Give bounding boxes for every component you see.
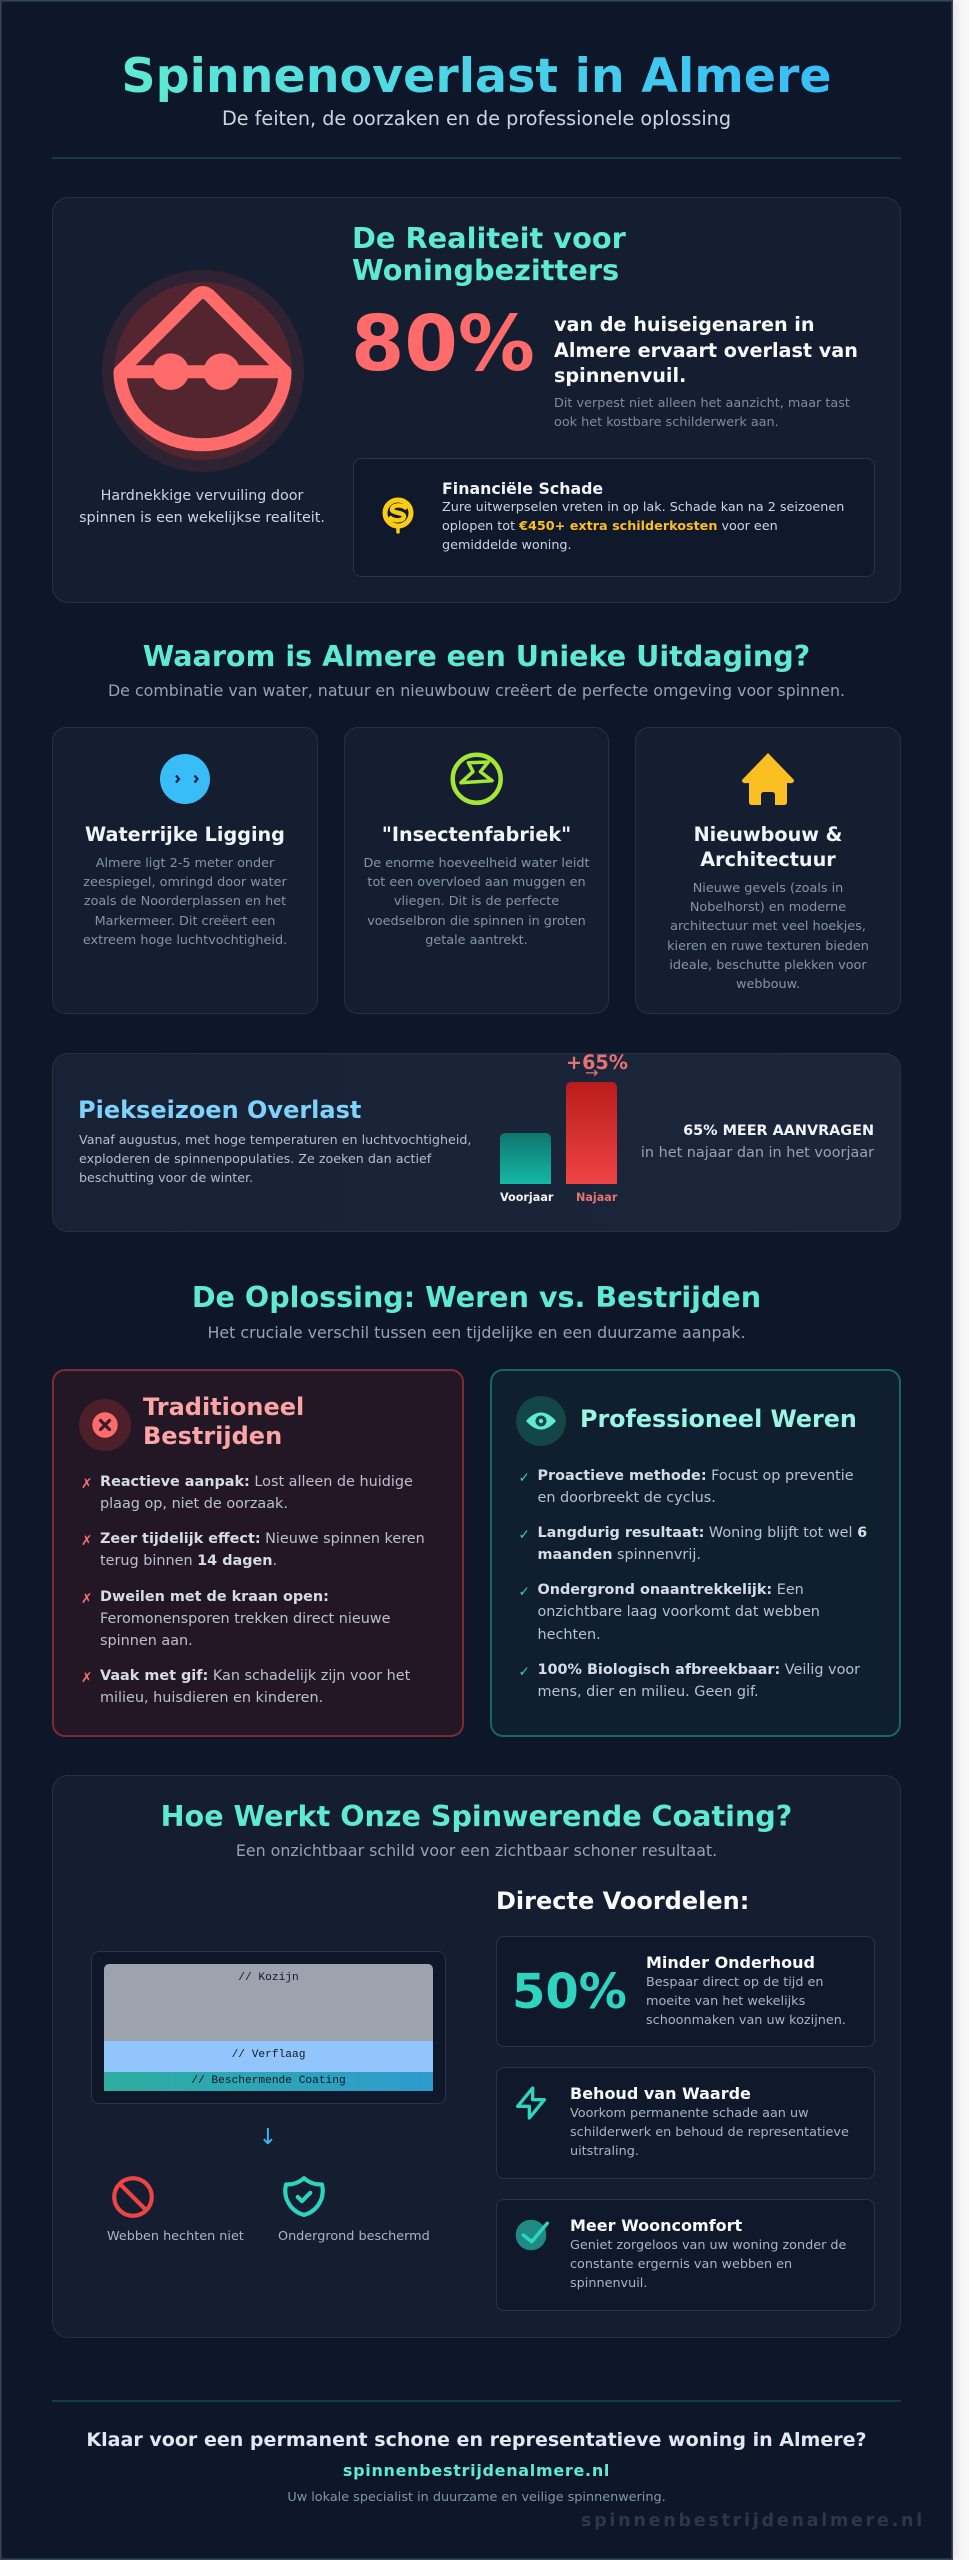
card text: getale aantrekt. <box>425 933 528 948</box>
card title: "Insectenfabriek" <box>382 823 571 846</box>
callout text: Zure uitwerpselen vreten in op lak. Schade kan na 2 seizoenen <box>442 500 844 515</box>
card text <box>83 856 287 948</box>
heading: peak season: Piekseizoen Overlast <box>78 1096 361 1124</box>
diagram: coating layers <box>91 1951 446 2104</box>
list item: 100% Biologisch afbreekbaar: Veilig voor <box>538 1662 860 1678</box>
peak season text: exploderen de spinnenpopulaties. Ze zoeken dan actief <box>79 1151 431 1166</box>
panel: traditional control: ✗ <box>81 1533 92 1549</box>
callout text: oplopen tot €450+ extra schilderkosten voor een <box>442 519 778 534</box>
panel: new construction <box>635 727 901 1014</box>
panel: insect factory <box>344 727 609 1014</box>
label: paint: // Verflaag <box>232 2049 305 2061</box>
peak season statistic: in het najaar dan in het voorjaar <box>641 1145 874 1161</box>
card text: ideale, beschutte plekken voor <box>669 958 867 973</box>
icon caption <box>79 488 325 526</box>
statistic: 50 percent: 50% <box>512 1964 627 2020</box>
card text: Almere ligt 2-5 meter onder <box>96 856 274 871</box>
list item: Dweilen met de kraan open: <box>100 1588 329 1604</box>
layer: protective coating <box>104 2072 433 2091</box>
benefit: more comfort <box>496 2199 875 2311</box>
card title: Nieuwbouw & <box>694 823 842 846</box>
peak season text: beschutting voor de winter. <box>79 1170 253 1185</box>
benefit text: spinnenvuil. <box>570 2276 647 2291</box>
panel: traditional control: ✗ <box>81 1590 92 1606</box>
list item <box>81 1474 413 1512</box>
icon caption: spinnen is een wekelijkse realiteit. <box>79 510 325 526</box>
layer: window frame <box>104 1964 433 2041</box>
subheading: solution: Het cruciale verschil tussen een tijdelijke en een duurzame aanpak. <box>208 1323 745 1342</box>
footer link: spinnenbestrijdenalmere.nl <box>343 2461 610 2480</box>
benefit text: Bespaar direct op de tijd en <box>646 1974 824 1990</box>
list item: milieu, huisdieren en kinderen. <box>100 1690 323 1706</box>
card text: tot een overvloed aan muggen en <box>367 875 586 890</box>
footer call to action: Klaar voor een permanent schone en representatieve woning in Almere? <box>86 2429 867 2451</box>
statistic description: Almere ervaart overlast van <box>554 339 858 362</box>
heading: traditional <box>143 1393 304 1450</box>
heading: reality <box>352 221 626 287</box>
list item: terug binnen 14 dagen. <box>100 1553 277 1569</box>
list item: en doorbreekt de cyclus. <box>538 1490 716 1506</box>
card text: zoals de Noorderplassen en het <box>84 894 286 909</box>
card text <box>363 856 590 948</box>
icon: check <box>516 2220 550 2250</box>
title: Spinnenoverlast in Almere <box>121 49 832 104</box>
peak season text <box>79 1132 471 1185</box>
list item: mens, dier en milieu. Geen gif. <box>538 1684 759 1700</box>
card text: kieren en ruwe texturen bieden <box>667 939 869 954</box>
card text: webbouw. <box>736 977 800 992</box>
footer note: Uw lokale specialist in duurzame en veilige spinnenwering. <box>287 2490 666 2505</box>
panel: reality for homeowners <box>52 197 901 603</box>
icon caption: Hardnekkige vervuiling door <box>101 488 303 504</box>
list item <box>81 1588 390 1649</box>
subheading: why Almere: De combinatie van water, natuur en nieuwbouw creëert de perfecte omgeving voor spinnen. <box>108 681 845 700</box>
icon: water <box>160 754 210 804</box>
card title: Architectuur <box>700 848 836 871</box>
icon: eye <box>516 1396 566 1446</box>
benefit text: Geniet zorgeloos van uw woning zonder de <box>570 2238 846 2253</box>
watermark: spinnenbestrijdenalmere.nl <box>581 2511 925 2531</box>
callout: financial damage <box>353 458 875 577</box>
list item: plaag op, niet de oorzaak. <box>100 1496 288 1512</box>
icon: house <box>742 753 794 805</box>
statistic note: Dit verpest niet alleen het aanzicht, maar tast <box>554 396 850 411</box>
icon: cross <box>79 1399 131 1451</box>
panel: professional prevention: ✓ <box>518 1527 530 1543</box>
peak season text: Vanaf augustus, met hoge temperaturen en luchtvochtigheid, <box>79 1132 471 1147</box>
list item <box>518 1468 854 1506</box>
panel: water location <box>52 727 318 1014</box>
list item: Reactieve aanpak: Lost alleen de huidige <box>100 1474 413 1490</box>
panel: peak season <box>52 1053 901 1232</box>
heading: why Almere: Waarom is Almere een Unieke Uitdaging? <box>143 639 810 673</box>
statistic description: van de huiseigenaren in <box>554 313 815 336</box>
icon: money <box>382 498 414 534</box>
list item: Zeer tijdelijk effect: Nieuwe spinnen keren <box>100 1531 425 1547</box>
icon: insect <box>450 752 503 805</box>
icon: shield <box>283 2176 325 2217</box>
peak season statistic <box>641 1123 874 1161</box>
benefit: preserve value <box>496 2067 875 2179</box>
label: coating: // Beschermende Coating <box>191 2075 346 2087</box>
card title <box>694 823 842 871</box>
benefit text: schilderwerk en behoud de representatieve <box>570 2125 849 2140</box>
list item: hechten. <box>538 1627 601 1643</box>
benefit text: schoonmaken van uw kozijnen. <box>646 2013 846 2028</box>
bar chart: spring vs autumn <box>500 1051 628 1204</box>
card text: Nieuwe gevels (zoals in <box>693 881 843 896</box>
label: plus 65 percent: +65% <box>566 1051 628 1074</box>
label: webs do not stick: Webben hechten niet <box>107 2229 244 2244</box>
card text: architectuur met veel hoekjes, <box>670 919 866 934</box>
panel: traditional control <box>52 1369 464 1737</box>
list item: Proactieve methode: Focust op preventie <box>538 1468 854 1484</box>
panel: traditional control: ✗ <box>81 1670 92 1686</box>
benefit title: Minder Onderhoud <box>646 1952 815 1972</box>
benefit text <box>570 2238 846 2291</box>
label: autumn: Najaar <box>576 1191 617 1204</box>
list item: Vaak met gif: Kan schadelijk zijn voor het <box>100 1668 410 1684</box>
arrow: → <box>585 1063 598 1082</box>
panel: professional prevention: ✓ <box>518 1664 530 1680</box>
card text: voedselbron die spinnen in groten <box>367 914 586 929</box>
statistic: 80 percent: 80% <box>351 300 535 389</box>
layer: paint <box>104 2041 433 2072</box>
list item <box>518 1582 820 1643</box>
list item <box>518 1525 867 1563</box>
list item: Langdurig resultaat: Woning blijft tot wel 6 <box>538 1525 867 1541</box>
icon: spider warning <box>102 270 304 472</box>
list item: maanden spinnenvrij. <box>538 1547 701 1563</box>
benefit: less maintenance <box>496 1936 875 2047</box>
bar: spring <box>500 1133 551 1184</box>
list item: Ondergrond onaantrekkelijk: Een <box>538 1582 804 1598</box>
list item <box>518 1662 860 1700</box>
panel: professional prevention <box>490 1369 901 1737</box>
card text <box>667 881 869 992</box>
statistic description: spinnenvuil. <box>554 364 686 387</box>
list item <box>81 1668 410 1706</box>
card text: extreem hoge luchtvochtigheid. <box>83 933 287 948</box>
heading: traditional: Traditioneel <box>143 1393 304 1421</box>
label: spring: Voorjaar <box>500 1191 553 1204</box>
heading: direct benefits: Directe Voordelen: <box>496 1887 749 1915</box>
card text: Markermeer. Dit creëert een <box>95 914 275 929</box>
heading: professional: Professioneel Weren <box>580 1405 857 1433</box>
card text: zeespiegel, omringd door water <box>83 875 287 890</box>
bar: autumn <box>566 1082 617 1184</box>
icon: lightning <box>516 2086 546 2120</box>
panel: coating explanation <box>52 1775 901 2338</box>
benefit text: uitstraling. <box>570 2144 639 2159</box>
callout text: gemiddelde woning. <box>442 538 572 553</box>
callout title: Financiële Schade <box>442 479 603 498</box>
icon: webs do not stick <box>112 2176 154 2218</box>
panel: traditional control: ✗ <box>81 1476 92 1492</box>
panel: professional prevention: ✓ <box>518 1470 530 1486</box>
label: surface protected: Ondergrond beschermd <box>278 2229 430 2244</box>
heading: reality: De Realiteit voor <box>352 221 626 255</box>
callout text <box>442 500 844 553</box>
list item <box>81 1531 425 1569</box>
list item: spinnen aan. <box>100 1633 193 1649</box>
heading: solution: De Oplossing: Weren vs. Bestrijden <box>192 1280 761 1314</box>
benefit title: Meer Wooncomfort <box>570 2216 742 2235</box>
benefit text <box>570 2106 849 2159</box>
heading: traditional: Bestrijden <box>143 1422 282 1450</box>
statistic description <box>554 313 858 387</box>
benefit text: Voorkom permanente schade aan uw <box>570 2106 809 2121</box>
benefit title: Behoud van Waarde <box>570 2084 751 2103</box>
card text: vliegen. Dit is de perfecte <box>394 894 559 909</box>
list item: onzichtbare laag voorkomt dat webben <box>538 1604 820 1620</box>
card text: Nobelhorst) en moderne <box>690 900 846 915</box>
statistic note <box>554 396 850 430</box>
benefit text: constante ergernis van webben en <box>570 2257 792 2272</box>
list item: Feromonensporen trekken direct nieuwe <box>100 1611 390 1627</box>
peak season statistic: 65% MEER AANVRAGEN <box>683 1123 874 1139</box>
card text: De enorme hoeveelheid water leidt <box>363 856 590 871</box>
panel: professional prevention: ✓ <box>518 1584 530 1600</box>
subheading: coating: Een onzichtbaar schild voor een zichtbaar schoner resultaat. <box>236 1841 717 1860</box>
arrow: down: ↓ <box>259 2125 277 2150</box>
card title: Waterrijke Ligging <box>85 823 285 846</box>
benefit text <box>646 1974 846 2028</box>
heading: coating: Hoe Werkt Onze Spinwerende Coating? <box>161 1799 792 1833</box>
heading: reality: Woningbezitters <box>352 253 619 287</box>
statistic note: ook het kostbare schilderwerk aan. <box>554 415 779 430</box>
benefit text: moeite van het wekelijks <box>646 1994 805 2009</box>
subtitle: De feiten, de oorzaken en de professionele oplossing <box>222 107 731 130</box>
label: window frame: // Kozijn <box>238 1972 299 1984</box>
